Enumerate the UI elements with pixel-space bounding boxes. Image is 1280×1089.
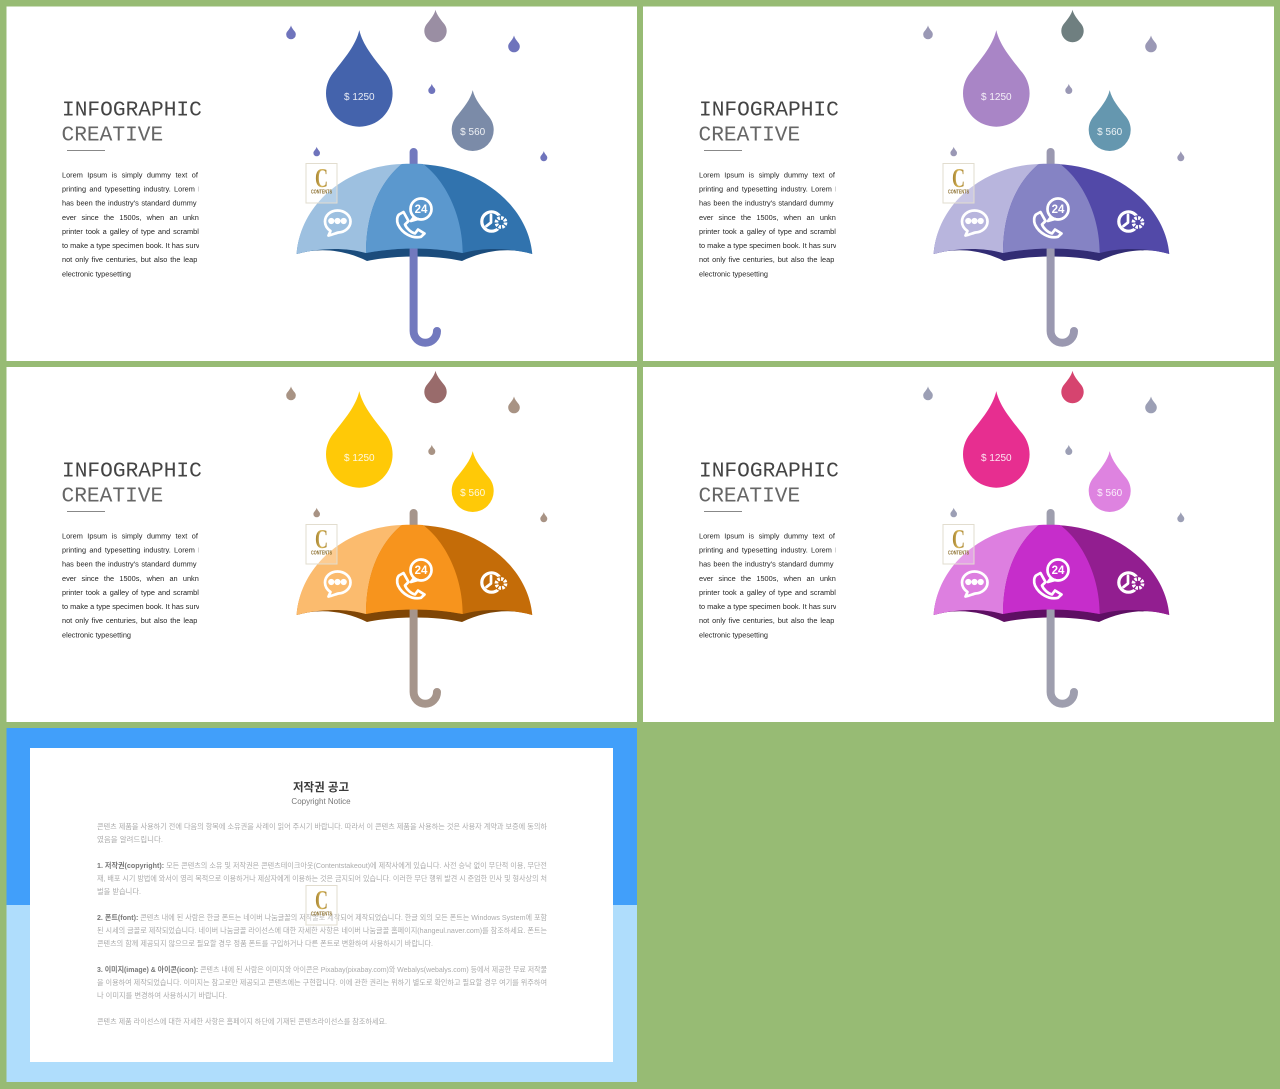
heading: infographic creative: CREATIVE: [698, 124, 800, 148]
raindrop: $ 560: [1089, 90, 1131, 151]
text block: lorem ipsum: [62, 172, 199, 278]
small raindrops: [286, 371, 547, 522]
heading: infographic creative: [698, 98, 839, 151]
heading: infographic creative: INFOGRAPHIC: [62, 98, 202, 122]
icon: chat bubble: [962, 572, 988, 596]
heading: copyright notice: 저작권 공고: [293, 780, 349, 794]
text block: lorem ipsum: printing and typesetting industry. Lorem Ipsum: [699, 546, 855, 554]
icon: chat bubble: [962, 210, 988, 236]
raindrop: $ 1250: $ 1250: [344, 453, 375, 464]
watermark logo: CONTENTS: [948, 550, 970, 556]
raindrop: $ 560: $ 560: [460, 127, 486, 138]
text block: lorem ipsum: printer took a galley of type and scrambled: [62, 227, 207, 236]
text block: lorem ipsum: electronic typesetting: [699, 270, 768, 278]
text block: lorem ipsum: ever since the 1500s, when an unknown: [62, 574, 212, 583]
text block: font clause: 된 시세의 글꼴로 제작되었습니다. 네이버 나눔글꼴 라이선스에 대한 자세한 사항은 네이버 나눔글꼴 홈페이지(hangeul.naver.com)를 참조하세요. 폰트는: [97, 926, 547, 935]
small raindrops: [286, 10, 547, 161]
text block: copyright clause: 벌을 받습니다.: [97, 887, 141, 896]
raindrop: $ 560: [1089, 451, 1131, 512]
raindrop: $ 560: [452, 90, 494, 151]
text block: lorem ipsum: Lorem Ipsum is simply dummy text of: [699, 170, 836, 180]
text block: lorem ipsum: to make a type specimen book. It has survived: [62, 602, 213, 611]
umbrella: [934, 152, 1169, 343]
watermark logo: CONTENTS: [311, 550, 333, 556]
text block: font clause: 2. 폰트(font): 콘텐츠 내에 된 사람은 한글 폰트는 네이버 나눔글꼴의 저작물로 제작되어 제작되었습니다. 한글 외의 모든 폰트는 Windows System에 포함: [97, 913, 547, 922]
raindrop: $ 560: [452, 451, 494, 512]
text block: lorem ipsum: not only five centuries, but also the leap into: [62, 616, 212, 625]
text block: lorem ipsum: Lorem Ipsum is simply dummy text of: [62, 532, 199, 540]
watermark logo: C: [315, 163, 328, 193]
text block: lorem ipsum: Lorem Ipsum is simply dummy text of: [699, 532, 836, 540]
text block: lorem ipsum: has been the industry's standard dummy text: [62, 560, 211, 568]
watermark logo: CONTENTS: [948, 190, 970, 196]
text block: lorem ipsum: has been the industry's standard dummy text: [699, 198, 848, 208]
text block: lorem ipsum: printing and typesetting industry. Lorem Ipsum: [62, 184, 218, 194]
umbrella: [934, 513, 1169, 704]
text block: lorem ipsum: printing and typesetting industry. Lorem Ipsum: [62, 546, 218, 554]
text block: lorem ipsum: electronic typesetting: [62, 630, 131, 640]
icon: clock with gear: [482, 212, 508, 231]
text block: image clause: 을 이용하여 제작되었습니다. 이미지는 참고로만 제공되고 콘텐츠에는 구현합니다. 이에 관한 권리는 위하기 별도로 확인하고 필요할 경우 여기를 위주하여: [97, 978, 547, 987]
icon: clock with gear: [482, 573, 508, 592]
icon: 24 hour phone: [397, 198, 432, 237]
raindrop: $ 1250: [326, 30, 393, 127]
text block: lorem ipsum: printer took a galley of type and scrambled: [699, 227, 844, 236]
text block: lorem ipsum: printing and typesetting industry. Lorem Ipsum: [699, 184, 855, 194]
text block: license note: 콘텐츠 제품 라이선스에 대한 자세한 사항은 홈페이지 하단에 기재된 콘텐츠라이선스를 참조하세요.: [97, 1017, 387, 1026]
watermark logo: C: [952, 163, 965, 193]
heading: infographic creative: [62, 460, 202, 512]
text block: lorem ipsum: has been the industry's standard dummy text: [62, 198, 211, 208]
text block: lorem ipsum: ever since the 1500s, when an unknown: [699, 574, 849, 583]
text block: intro: [97, 822, 547, 844]
raindrop: $ 560: $ 560: [1097, 127, 1123, 138]
raindrop: $ 1250: [326, 391, 393, 488]
heading: infographic creative: [62, 98, 202, 151]
raindrop: $ 1250: $ 1250: [981, 453, 1012, 464]
heading: infographic creative: CREATIVE: [62, 484, 163, 508]
watermark logo: C: [315, 885, 328, 915]
icon: 24 hour phone: [1034, 198, 1068, 237]
raindrop: $ 1250: [963, 30, 1030, 127]
watermark logo: C: [315, 524, 328, 554]
text block: lorem ipsum: Lorem Ipsum is simply dummy text of: [62, 170, 199, 180]
heading: infographic creative: INFOGRAPHIC: [699, 98, 839, 122]
umbrella: [297, 152, 532, 343]
text block: copyright clause: 재, 배포 시기 방법에 와서이 영리 목적으로 이용하거나 제삼자에게 이용하는 것은 금지되어 있습니다. 이러한 무단 행위 발견 시 준엄한 민사 및 형사상의 처: [97, 874, 547, 883]
text block: image clause: [97, 965, 547, 1000]
icon: 24 hour phone: 24: [415, 204, 428, 216]
text block: copyright clause: 1. 저작권(copyright): 모든 콘텐츠의 소유 및 저작권은 콘텐츠테이크아웃(Contentstakeout)에 제작사에게 있습니다. 사전 승낙 없이 무단적 이용, 무단전: [97, 861, 547, 870]
heading: infographic creative: INFOGRAPHIC: [62, 460, 202, 484]
text block: lorem ipsum: not only five centuries, but also the leap into: [62, 255, 212, 264]
text block: lorem ipsum: [62, 533, 199, 639]
icon: chat bubble: [325, 210, 350, 236]
icon: 24 hour phone: [397, 560, 432, 598]
small raindrops: [923, 10, 1184, 161]
text block: image clause: 3. 이미지(image) & 아이콘(icon): 콘텐츠 내에 된 사람은 이미지와 아이콘은 Pixabay(pixabay.com)와 Webalys(webalys.com) 등에서 제공한 무료 저작물: [97, 965, 547, 974]
watermark logo: C: [952, 524, 965, 554]
raindrop: $ 1250: $ 1250: [981, 92, 1012, 103]
text block: lorem ipsum: electronic typesetting: [62, 270, 131, 278]
text block: lorem ipsum: ever since the 1500s, when an unknown: [699, 213, 849, 222]
text block: lorem ipsum: printer took a galley of type and scrambled: [699, 588, 844, 597]
watermark logo: [306, 163, 337, 203]
text block: lorem ipsum: [699, 533, 836, 639]
icon: chat bubble: [325, 572, 350, 596]
raindrop: $ 560: $ 560: [460, 488, 486, 499]
text block: lorem ipsum: not only five centuries, but also the leap into: [699, 616, 849, 625]
watermark logo: [306, 524, 337, 564]
heading: copyright notice: Copyright Notice: [291, 797, 351, 806]
text block: lorem ipsum: to make a type specimen book. It has survived: [62, 241, 213, 250]
watermark logo: [943, 524, 974, 564]
watermark logo: [943, 163, 974, 203]
panel: copyright notice: [6, 728, 637, 1082]
icon: 24 hour phone: 24: [1052, 565, 1065, 577]
heading: infographic creative: CREATIVE: [62, 124, 163, 148]
umbrella: [297, 513, 532, 704]
text block: lorem ipsum: to make a type specimen book. It has survived: [699, 241, 850, 250]
heading: infographic creative: INFOGRAPHIC: [699, 460, 839, 484]
heading: infographic creative: [698, 460, 839, 512]
text block: lorem ipsum: ever since the 1500s, when an unknown: [62, 213, 212, 222]
watermark logo: CONTENTS: [311, 190, 333, 196]
text block: lorem ipsum: has been the industry's standard dummy text: [699, 560, 848, 568]
heading: copyright notice: [291, 780, 351, 806]
text block: lorem ipsum: electronic typesetting: [699, 630, 768, 640]
raindrop: $ 1250: $ 1250: [344, 92, 375, 103]
watermark logo: [306, 885, 337, 925]
text block: lorem ipsum: to make a type specimen book. It has survived: [699, 602, 850, 611]
text block: image clause: 나 이미지를 변경하여 사용하시기 바랍니다.: [97, 991, 227, 1000]
text block: intro: 콘텐츠 제품을 사용하기 전에 다음의 항목에 소유권을 사례이 읽어 주시기 바랍니다. 따라서 이 콘텐츠 제품을 사용하는 것은 사용자 계약과 보증에 동의하: [97, 822, 547, 831]
text block: lorem ipsum: not only five centuries, but also the leap into: [699, 255, 849, 264]
panel: orange umbrella infographic: [6, 367, 637, 722]
text block: font clause: [97, 913, 547, 948]
icon: 24 hour phone: 24: [1052, 204, 1065, 216]
panel: magenta umbrella infographic: [643, 367, 1274, 722]
watermark logo: CONTENTS: [311, 912, 333, 918]
icon: clock with gear: [1119, 212, 1145, 231]
text block: lorem ipsum: [699, 172, 836, 278]
text block: copyright clause: [97, 861, 547, 896]
panel: purple umbrella infographic: [643, 6, 1274, 361]
icon: 24 hour phone: [1034, 560, 1068, 598]
small raindrops: [923, 371, 1184, 522]
text block: intro: 였음을 알려드립니다.: [97, 835, 163, 844]
text block: font clause: 콘텐츠의 함께 제공되지 않으므로 필요할 경우 정품 폰트를 구입하거나 다른 폰트로 변환하여 사용하시기 바랍니다.: [97, 939, 433, 948]
icon: clock with gear: [1119, 573, 1145, 592]
raindrop: $ 560: $ 560: [1097, 488, 1123, 499]
raindrop: $ 1250: [963, 391, 1030, 488]
heading: infographic creative: CREATIVE: [698, 484, 800, 508]
text block: lorem ipsum: printer took a galley of type and scrambled: [62, 588, 207, 597]
icon: 24 hour phone: 24: [415, 565, 428, 577]
panel: blue umbrella infographic: [6, 6, 637, 361]
